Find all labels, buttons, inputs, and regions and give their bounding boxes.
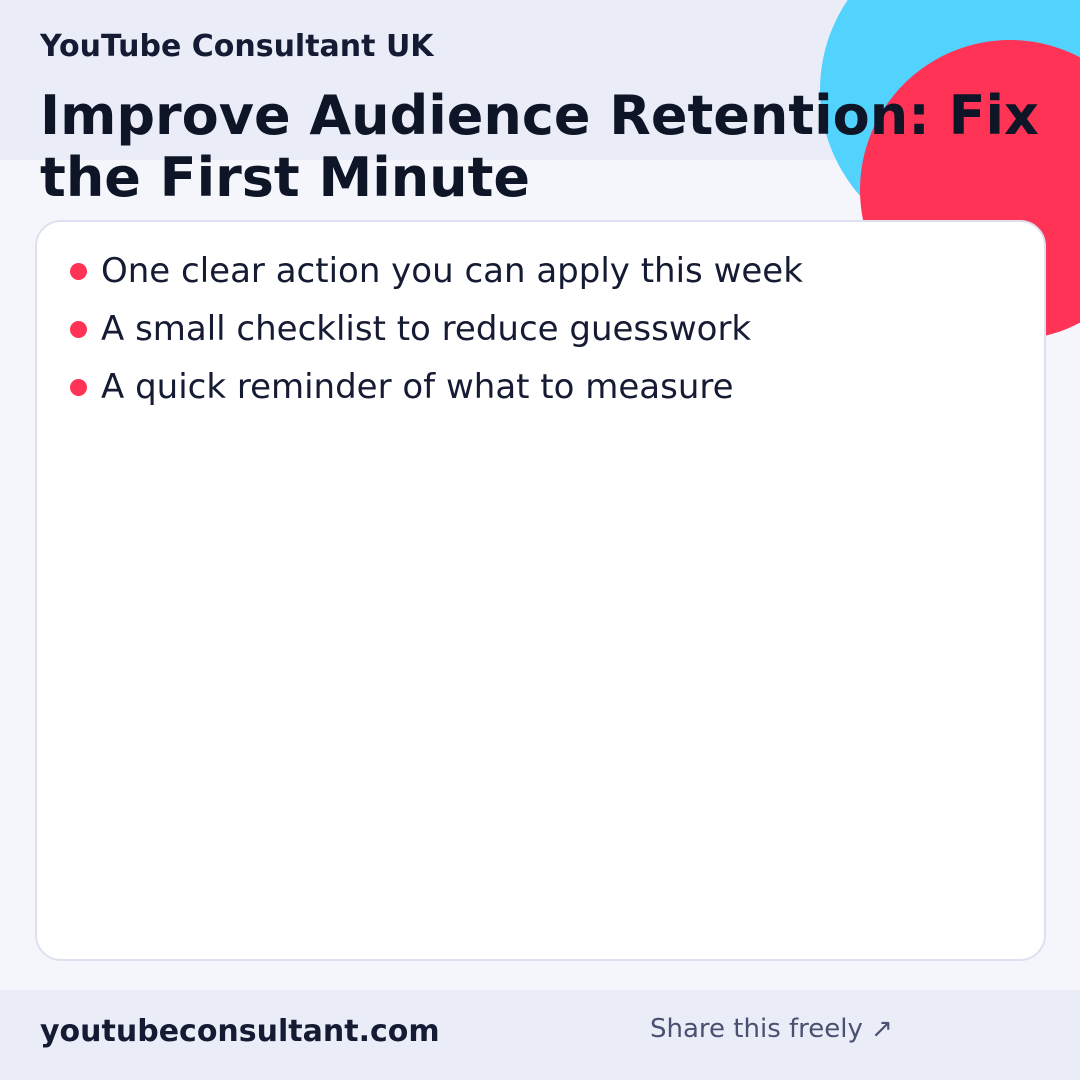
share note: Share this freely ↗ [650,1014,893,1044]
footer url: youtubeconsultant.com [40,1014,440,1049]
panel: card [35,220,1046,961]
header band [0,0,1080,160]
bullet 1: One clear action you can apply this week [101,251,803,291]
footer band [0,990,1080,1080]
bullet 2: A small checklist to reduce guesswork [101,309,751,349]
bullet list [70,251,803,407]
title: Improve Audience Retention: Fix the First Minute [40,84,1039,209]
brand label: YouTube Consultant UK [40,29,434,64]
bullet 3: A quick reminder of what to measure [101,367,734,407]
decorative circle: red [860,40,1080,340]
decorative circle: cyan [820,0,1080,250]
